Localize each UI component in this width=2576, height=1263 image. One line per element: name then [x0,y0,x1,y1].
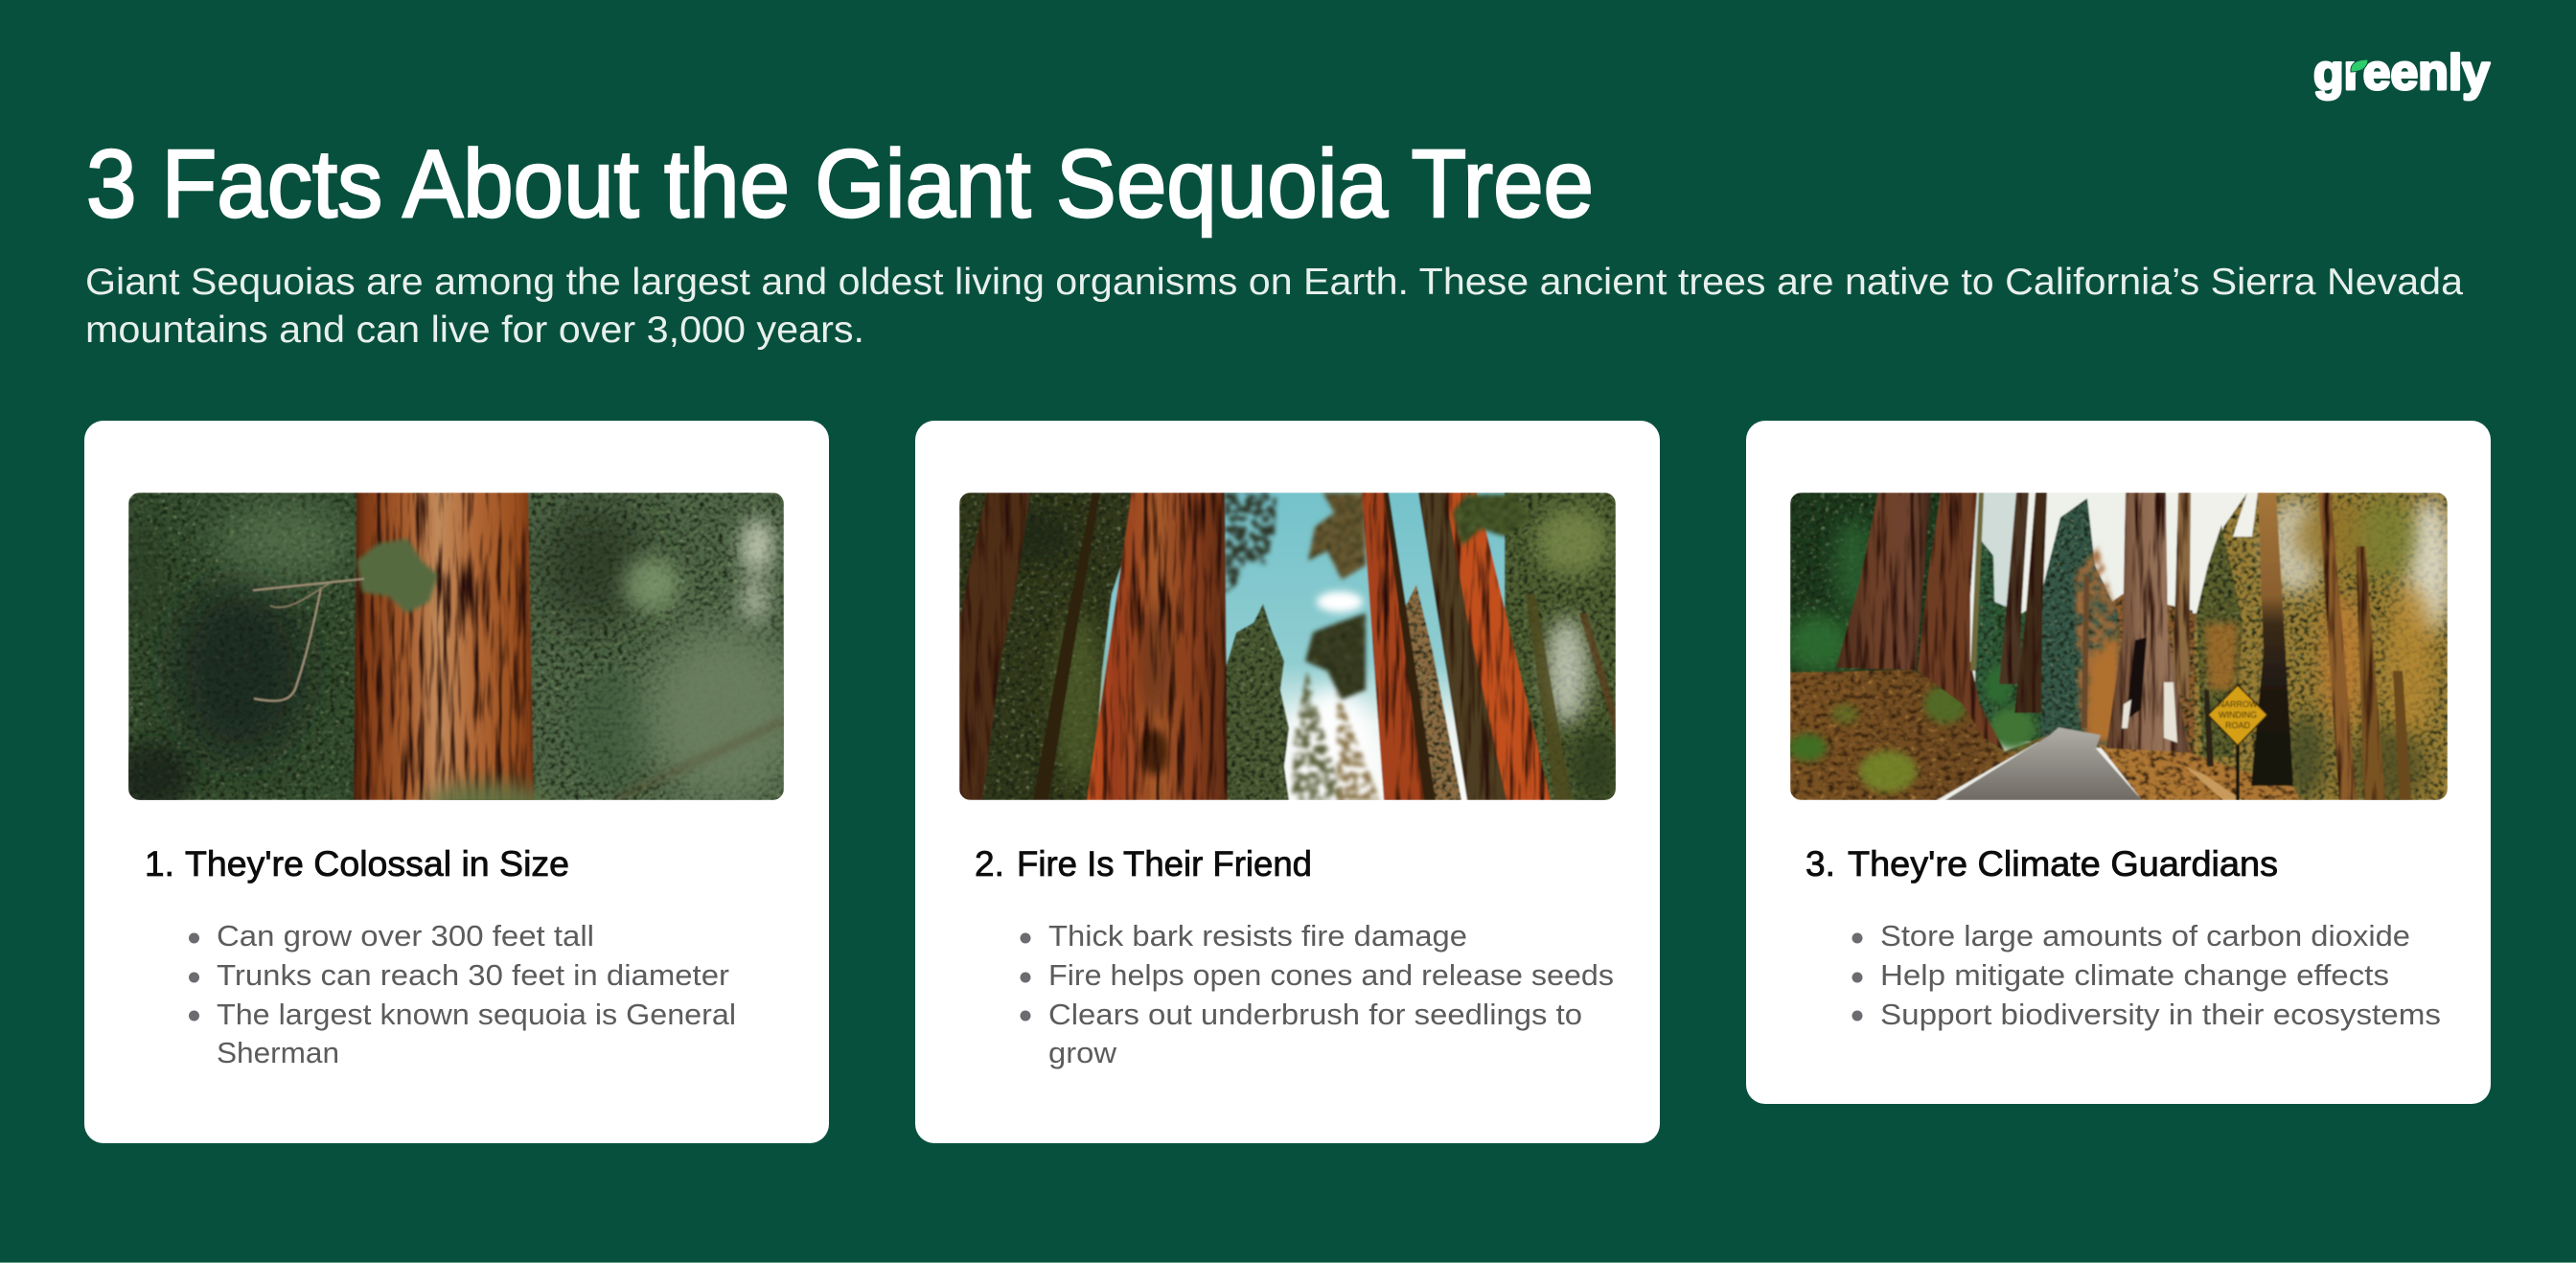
intro text: Giant Sequoias are among the largest and oldest living organisms on Earth. These ancient trees are native to California’s Sierra Nevada [85,262,2463,303]
left trunks [1836,493,1931,670]
dark left foliage [1790,493,1944,684]
bullet list: fact 2 [1020,919,1614,1069]
trunk [354,493,534,800]
trunk A [1362,493,1432,800]
bullet list: fact 1: The largest known sequoia is General [217,998,736,1031]
panel: fact 3 climate guardians [1746,421,2491,1104]
foliage beside main trunk [1225,493,1276,594]
heading: fact 2: Fire Is Their Friend [1017,844,1312,884]
centre trunk [2172,493,2191,700]
canopy over trunk C [1453,494,1530,546]
trunk C orange [1445,493,1551,800]
heading: fact 3: 3. [1806,844,1835,884]
photo: sequoia trunk among green foliage [128,493,784,800]
right ground [2099,745,2300,800]
sign: narrow winding road: ROAD [2225,721,2250,730]
sign: narrow winding road: WINDING [2219,710,2257,720]
bullet list: fact 1: Sherman [217,1036,339,1069]
trunk B dark [1418,493,1513,800]
green understory behind middle trees [1992,602,2043,743]
foliage sprig over trunk [356,539,438,613]
heading: fact 1: They're Colossal in Size [185,844,569,884]
bullet list: fact 1 [189,919,736,1069]
branch [253,579,364,700]
pale distant tree [1397,585,1461,800]
brown backdrop behind centre trunk [2095,593,2198,756]
logo: greenly: greenly [2313,45,2490,101]
bullet list: fact 2: Thick bark resists fire damage [1048,919,1467,953]
photo: sequoias against blue sky [959,493,1619,824]
bullet list: fact 2: grow [1048,1036,1117,1069]
title: 3 Facts About the Giant Sequoia Tree [86,130,1594,238]
heading: fact 2: 2. [975,844,1004,884]
bullet list: fact 1: Trunks can reach 30 feet in diameter [217,958,729,992]
panel: fact 2 fire is their friend [915,421,1660,1143]
intro text [85,262,2463,351]
left foliage [959,493,1145,800]
road [1945,727,2142,800]
panel: fact 1 colossal in size [84,421,829,1143]
middle green foliage [1974,540,1995,687]
intro text: mountains and can live for over 3,000 years. [85,310,864,351]
heading: fact 1: 1. [145,844,174,884]
right autumn foliage [2195,493,2448,800]
bullet list: fact 2: Clears out underbrush for seedlings to [1048,998,1582,1031]
bullet list: fact 3: Store large amounts of carbon dioxide [1880,919,2410,953]
bullet list: fact 3: Help mitigate climate change effects [1880,958,2389,992]
right trunks [2251,493,2293,786]
clouds [1317,591,1363,612]
upper foliage on right of sky [1308,493,1366,580]
pale sky behind middle trees [1974,493,2022,617]
sign: narrow winding road: NARROW [2218,700,2258,709]
bullet list: fact 1: Can grow over 300 feet tall [217,919,594,953]
bullet list: fact 3: Support biodiversity in their ecosystems [1880,998,2441,1031]
conifer [2196,525,2242,757]
main trunk [1087,493,1228,800]
hill [1790,670,2050,800]
white sky gap [2191,495,2245,615]
centre conifer [1225,604,1289,800]
bullet list: fact 3 [1852,919,2441,1031]
right foliage [1505,493,1616,800]
icon: logo leaf [2351,59,2368,72]
bullet list: fact 2: Fire helps open cones and release seeds [1048,958,1614,992]
sign: narrow winding road [2208,685,2267,800]
heading: fact 3: They're Climate Guardians [1848,844,2278,884]
photo: road through sequoia forest [1784,493,2452,805]
